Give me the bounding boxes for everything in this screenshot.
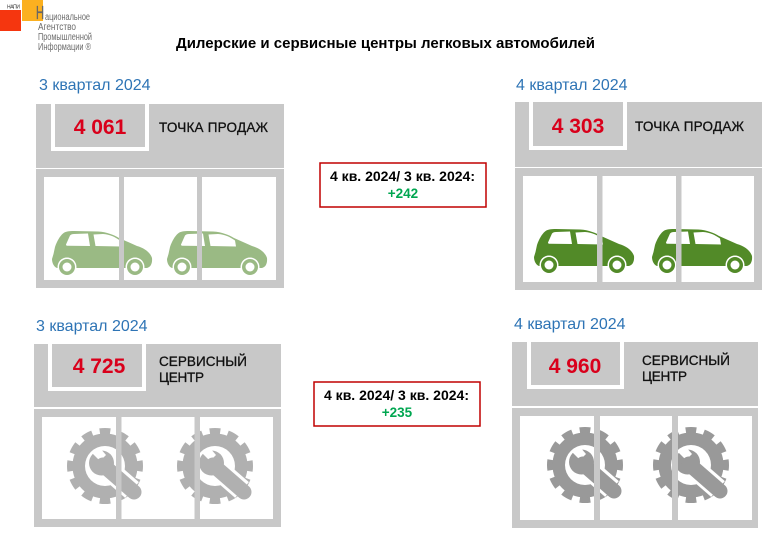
callout: service change <box>314 382 480 426</box>
callout: sales change <box>320 163 486 207</box>
icon: car <box>652 229 752 274</box>
number: 4 960: 4 960 <box>549 355 601 378</box>
panel: service Q3 <box>34 344 281 527</box>
label: сервисный центр: СЕРВИСНЫЙ <box>642 353 730 368</box>
icon: gear with wrench <box>70 432 140 500</box>
logo: НАПИ <box>7 4 20 10</box>
callout: service change: +235 <box>382 405 413 420</box>
panel: sales Q3 <box>36 104 284 288</box>
icon: car <box>534 229 634 274</box>
logo: ациональное <box>45 12 90 23</box>
icon: car <box>52 231 152 276</box>
callout: sales change: 4 кв. 2024/ 3 кв. 2024: <box>330 168 475 184</box>
panel: service Q3: ЦЕНТР <box>159 370 204 385</box>
logo: Промышленной <box>38 32 92 43</box>
label: точка продаж: ТОЧКА ПРОДАЖ <box>635 119 745 134</box>
number: 4 061: 4 061 <box>74 116 127 139</box>
heading: 4 квартал 2024 service: 4 квартал 2024 <box>514 316 626 333</box>
title: Дилерские и сервисные центры легковых автомобилей <box>176 36 595 52</box>
logo: Информации ® <box>38 41 91 53</box>
logo: Н <box>36 3 44 23</box>
number: 4 725: 4 725 <box>73 355 126 378</box>
panel: service Q4 <box>512 342 758 528</box>
icon: gear with wrench <box>550 430 620 500</box>
heading: 3 квартал 2024 service: 3 квартал 2024 <box>36 318 148 335</box>
panel: sales Q4 <box>515 102 762 290</box>
label: сервисный центр: СЕРВИСНЫЙ <box>159 354 247 369</box>
label: точка продаж: ТОЧКА ПРОДАЖ <box>159 120 269 135</box>
heading: 4 квартал 2024 sales: 4 квартал 2024 <box>516 77 628 94</box>
logo <box>0 0 92 53</box>
panel: service Q4: ЦЕНТР <box>642 369 687 384</box>
logo: Агентство <box>38 22 76 33</box>
callout: sales change: +242 <box>388 186 418 201</box>
icon: gear with wrench <box>656 430 726 500</box>
icon: gear with wrench <box>180 432 250 500</box>
number: 4 303: 4 303 <box>552 115 604 138</box>
callout: service change: 4 кв. 2024/ 3 кв. 2024: <box>324 387 469 403</box>
icon: car <box>167 231 267 276</box>
heading: 3 квартал 2024 sales: 3 квартал 2024 <box>39 77 151 94</box>
